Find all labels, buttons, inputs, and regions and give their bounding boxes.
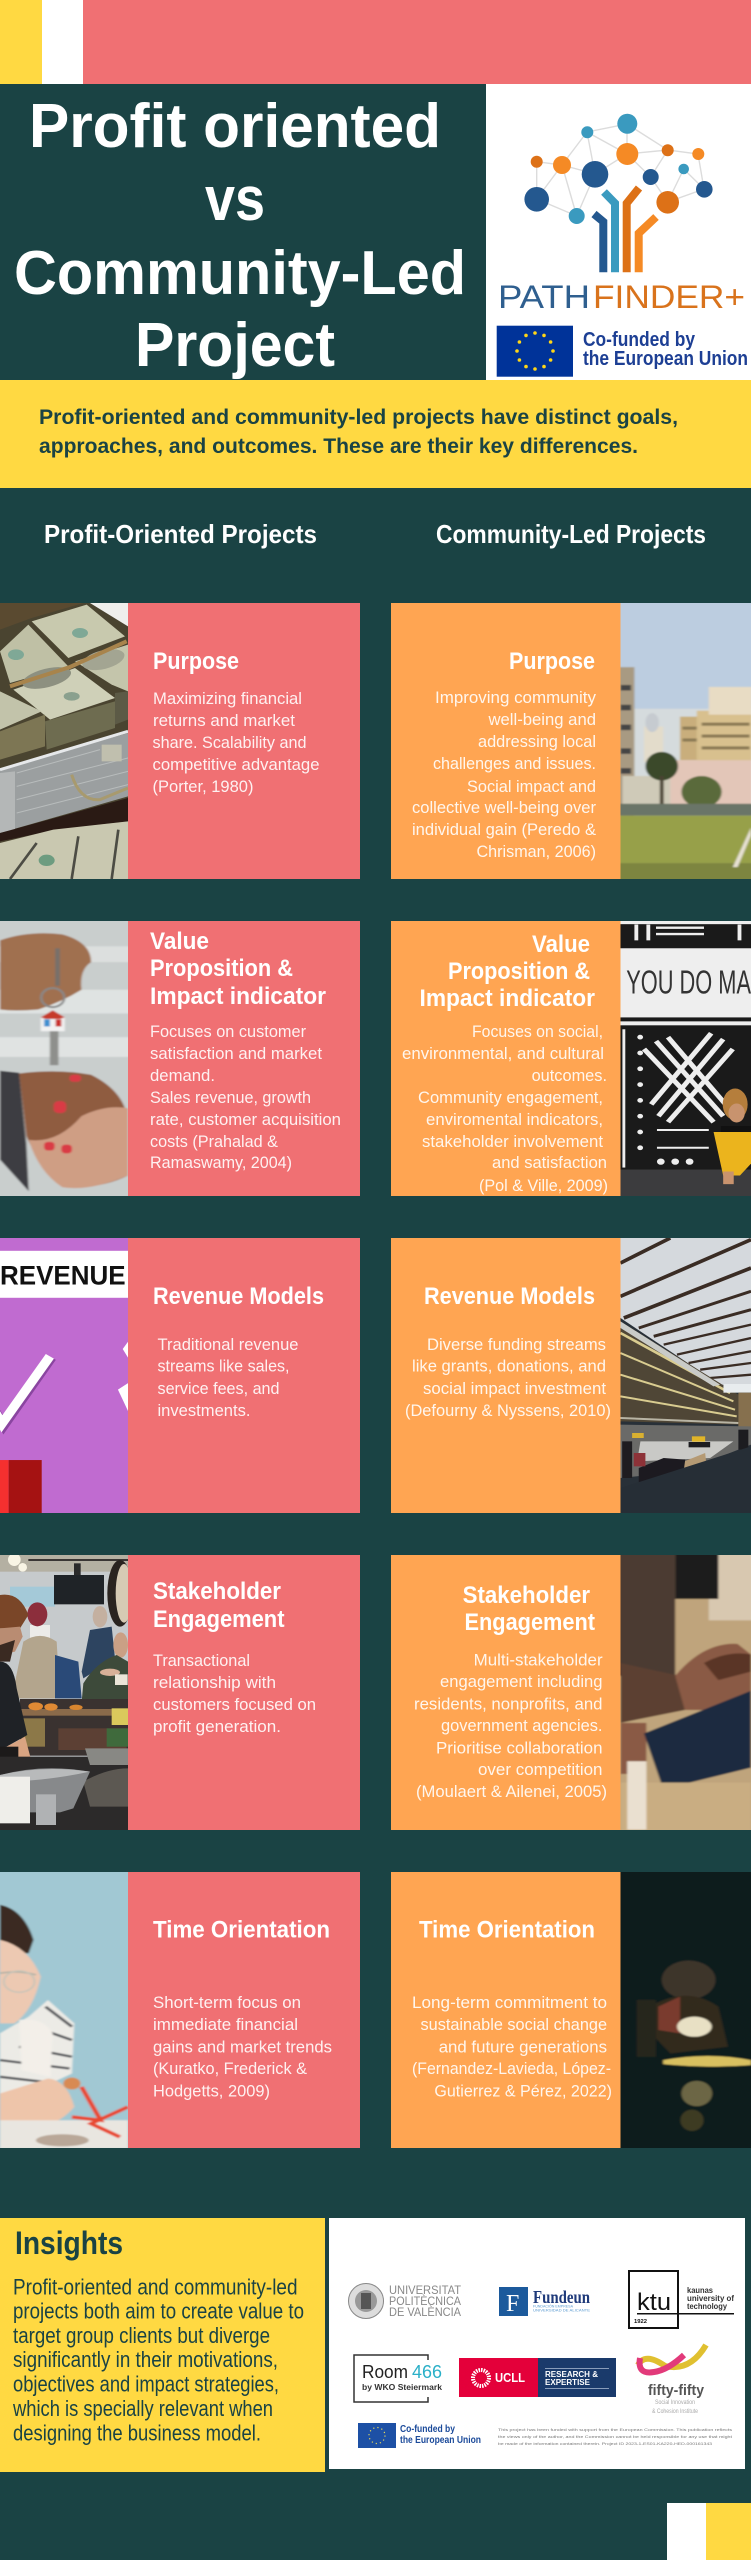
logo: KTU: technology xyxy=(687,2301,727,2311)
logo wordmark: FINDER+ xyxy=(593,279,745,315)
heading xyxy=(150,928,326,1010)
logo: KTU: kaunas xyxy=(687,2285,713,2295)
text block: Hodgetts, 2009) xyxy=(153,2082,270,2101)
text block: (Porter, 1980) xyxy=(152,777,254,796)
panel: profit stakeholder engagement xyxy=(128,1555,360,1830)
text block: returns and market xyxy=(153,711,295,730)
title: Community-Led xyxy=(14,239,466,308)
text block: Ramaswamy, 2004) xyxy=(150,1153,292,1172)
heading: Stakeholder xyxy=(153,1578,281,1605)
text block: relationship with xyxy=(153,1673,276,1692)
panel: community revenue models xyxy=(391,1238,620,1513)
logo: fifty-fifty: fifty-fifty xyxy=(648,2382,705,2399)
text block: addressing local xyxy=(478,732,596,751)
panel: profit revenue models xyxy=(128,1238,360,1513)
title: vs xyxy=(205,165,265,234)
photo: business handshake xyxy=(620,1555,751,1830)
text block xyxy=(402,1022,608,1195)
logo: Fundeun xyxy=(499,2287,591,2317)
text block: Sales revenue, growth xyxy=(150,1088,311,1107)
text block: (Defourny & Nyssens, 2010) xyxy=(405,1401,611,1420)
photo: revenue graphic xyxy=(0,1238,128,1513)
text block xyxy=(12,2274,304,2446)
text block: streams like sales, xyxy=(158,1356,290,1376)
text block: (Kuratko, Frederick & xyxy=(153,2059,308,2078)
logo: Room 466: Room xyxy=(362,2362,408,2382)
text block: Focuses on customer xyxy=(150,1022,306,1041)
text block: engagement including xyxy=(440,1672,602,1691)
heading: Proposition & xyxy=(448,958,590,985)
heading: Time Orientation xyxy=(419,1917,595,1944)
logo: KTU: 1922 xyxy=(634,2319,647,2325)
text block: demand. xyxy=(150,1066,215,1085)
text block: objectives and impact strategies, xyxy=(13,2372,279,2397)
title: Profit oriented xyxy=(29,92,441,161)
logo: KTU xyxy=(629,2271,734,2328)
panel: profit value proposition xyxy=(128,921,360,1196)
text block: collective well-being over xyxy=(412,798,596,817)
text block: significantly in their motivations, xyxy=(13,2347,278,2372)
logo: UCLL: EXPERTISE xyxy=(545,2378,591,2387)
text block: Improving community xyxy=(435,688,596,707)
logo: Fundeun: Fundeun xyxy=(533,2287,590,2307)
text block: social impact investment xyxy=(423,1379,606,1398)
text block: profit generation. xyxy=(153,1717,281,1736)
co-funded label: Co-funded by xyxy=(583,329,696,351)
intro band: Profit-oriented and community-led projects have distinct goals, xyxy=(39,406,678,429)
text block: over competition xyxy=(478,1760,602,1779)
logo: KTU: university of xyxy=(687,2293,734,2303)
text block xyxy=(405,1335,611,1420)
text block: outcomes. xyxy=(532,1066,607,1085)
logo: Fundeun: UNIVERSIDAD DE ALICANTE xyxy=(533,2308,591,2312)
heading: Purpose xyxy=(509,648,595,675)
heading: Impact indicator xyxy=(420,985,595,1012)
logo: fifty-fifty: & Cohesion Institute xyxy=(652,2409,699,2415)
text block: well-being and xyxy=(488,710,596,729)
text block: which is specially relevant when xyxy=(12,2396,273,2421)
logo: UCLL: UCLL xyxy=(495,2370,525,2385)
text block: challenges and issues. xyxy=(433,754,596,773)
heading: Revenue Models xyxy=(424,1283,595,1310)
text block: Focuses on social, xyxy=(472,1022,603,1041)
text block: target group clients but diverge xyxy=(13,2323,270,2348)
text block: immediate financial xyxy=(153,2015,298,2034)
text block: enviromental indicators, xyxy=(426,1110,603,1129)
icon: network tree xyxy=(524,114,713,272)
logo wordmark: PATH xyxy=(498,279,590,315)
panel: insights xyxy=(0,2218,325,2472)
text block xyxy=(152,689,320,796)
logo: Room 466: by WKO Steiermark xyxy=(362,2382,442,2392)
logo: Room 466: 466 xyxy=(412,2362,442,2382)
panel: profit time orientation xyxy=(128,1872,360,2148)
logo: UCLL: RESEARCH & xyxy=(545,2370,598,2379)
text block: customers focused on xyxy=(153,1695,316,1714)
disclaimer xyxy=(498,2427,733,2446)
text block: investments. xyxy=(158,1401,250,1420)
photo: money case xyxy=(0,603,128,879)
logo: UPV: UNIVERSITAT xyxy=(389,2283,462,2297)
photo: night figure on water xyxy=(620,1872,751,2148)
icon: EU flag xyxy=(497,326,573,377)
logo wordmark xyxy=(498,279,745,315)
photo: city skyline xyxy=(620,603,751,879)
photo: man with ribbon xyxy=(0,1872,128,2148)
text block: individual gain (Peredo & xyxy=(412,820,597,839)
heading: Impact indicator xyxy=(150,983,326,1010)
column heading: community-led: Community-Led Projects xyxy=(436,519,706,549)
logo: UPV xyxy=(348,2283,462,2319)
text block: (Pol & Ville, 2009) xyxy=(479,1176,608,1195)
text block: Diverse funding streams xyxy=(427,1335,606,1354)
heading xyxy=(420,931,595,1012)
logo: EU co-funded: Co-funded by xyxy=(400,2424,455,2435)
logo: EU co-funded: the European Union xyxy=(400,2435,481,2446)
text block: Transactional xyxy=(153,1651,250,1670)
text block xyxy=(412,1993,612,2101)
intro band: approaches, and outcomes. These are their key differences. xyxy=(39,435,638,458)
text block: Profit-oriented and community-led xyxy=(13,2274,298,2299)
heading: Proposition & xyxy=(150,955,293,982)
photo: patterned mural xyxy=(620,921,751,1196)
photo: market stall xyxy=(0,1555,128,1830)
photo: atrium hall xyxy=(620,1238,751,1513)
text block: Community engagement, xyxy=(418,1088,603,1107)
heading: Insights xyxy=(15,2225,123,2261)
text block: Prioritise collaboration xyxy=(436,1739,602,1758)
title xyxy=(0,84,486,380)
text block: gains and market trends xyxy=(153,2038,332,2057)
text block xyxy=(158,1335,298,1420)
logo: fifty-fifty xyxy=(638,2345,706,2415)
column heading: profit-oriented: Profit-Oriented Projects xyxy=(44,519,317,549)
heading: Purpose xyxy=(153,648,239,675)
text block: Long-term commitment to xyxy=(412,1993,607,2012)
text block: like grants, donations, and xyxy=(412,1356,606,1376)
text block xyxy=(153,1651,316,1736)
co-funded label xyxy=(583,329,748,370)
heading: Time Orientation xyxy=(153,1917,330,1944)
text block: designing the business model. xyxy=(13,2421,261,2446)
heading: Value xyxy=(150,928,209,955)
heading xyxy=(463,1582,595,1636)
logo: Fundeun: F xyxy=(506,2291,519,2317)
heading: Engagement xyxy=(153,1606,284,1633)
logo: fifty-fifty: Social Innovation xyxy=(655,2400,695,2406)
panel: profit purpose xyxy=(128,603,360,879)
text block: Multi-stakeholder xyxy=(474,1650,603,1670)
logo: UPV: DE VALÈNCIA xyxy=(389,2304,461,2319)
text block: share. Scalability and xyxy=(152,733,306,752)
text block: Maximizing financial xyxy=(153,689,302,708)
heading: Engagement xyxy=(464,1609,595,1636)
logo: Fundeun: FUNDACIÓN EMPRESA xyxy=(533,2304,574,2308)
text block: costs (Prahalad & xyxy=(150,1132,279,1151)
text block: service fees, and xyxy=(158,1379,280,1398)
disclaimer: be made of the information contained therein. Project ID 2023-1-ES01-KA220-HED-000161343 xyxy=(498,2441,713,2446)
panel: PATHFINDER+ logo xyxy=(486,84,751,380)
bottom colour bar xyxy=(667,2503,751,2560)
panel: community time orientation xyxy=(391,1872,620,2148)
text block: (Moulaert & Ailenei, 2005) xyxy=(416,1782,607,1801)
text block: competitive advantage xyxy=(152,755,320,774)
logo: Room 466 xyxy=(354,2355,442,2402)
heading: Stakeholder xyxy=(463,1582,590,1609)
disclaimer: This project has been funded with support from the European Commission. This publication reflects xyxy=(498,2427,732,2432)
panel: community purpose xyxy=(391,603,620,879)
text block: environmental, and cultural xyxy=(402,1044,604,1063)
logo: EU co-funded xyxy=(358,2423,481,2448)
text block: projects both aim to create value to xyxy=(13,2299,304,2324)
text block: and satisfaction xyxy=(492,1153,607,1172)
text block: government agencies. xyxy=(441,1716,602,1735)
heading xyxy=(153,1578,284,1633)
text block xyxy=(412,688,597,861)
text block xyxy=(153,1993,332,2101)
text block: and future generations xyxy=(439,2038,607,2057)
text block: residents, nonprofits, and xyxy=(414,1695,602,1714)
text block: sustainable social change xyxy=(420,2015,607,2034)
text block: Gutierrez & Pérez, 2022) xyxy=(434,2082,612,2101)
logo: UPV: POLITÈCNICA xyxy=(389,2293,461,2308)
text block: Traditional revenue xyxy=(158,1335,298,1354)
logo: UCLL xyxy=(459,2358,616,2397)
logo: KTU: ktu xyxy=(637,2289,671,2316)
title: Project xyxy=(135,311,335,380)
panel: partner logos xyxy=(329,2218,745,2469)
text block: Chrisman, 2006) xyxy=(476,842,596,861)
text block xyxy=(150,1022,341,1172)
text block xyxy=(414,1650,607,1801)
text block: Social impact and xyxy=(467,777,596,796)
disclaimer: the views only of the author, and the Commission cannot be held responsible for any use that might xyxy=(498,2434,733,2439)
text block: (Fernandez-Lavieda, López- xyxy=(412,2059,611,2078)
intro band xyxy=(0,380,751,488)
panel: community stakeholder engagement xyxy=(391,1555,620,1830)
heading: Revenue Models xyxy=(153,1283,324,1310)
photo: key and handshake xyxy=(0,921,128,1196)
heading: Value xyxy=(532,931,590,958)
text block: stakeholder involvement xyxy=(422,1132,603,1151)
panel: community value proposition xyxy=(391,921,620,1196)
text block: Short-term focus on xyxy=(153,1993,301,2012)
text block: satisfaction and market xyxy=(150,1044,322,1063)
text block: rate, customer acquisition xyxy=(150,1110,341,1129)
top colour bar xyxy=(0,0,751,84)
